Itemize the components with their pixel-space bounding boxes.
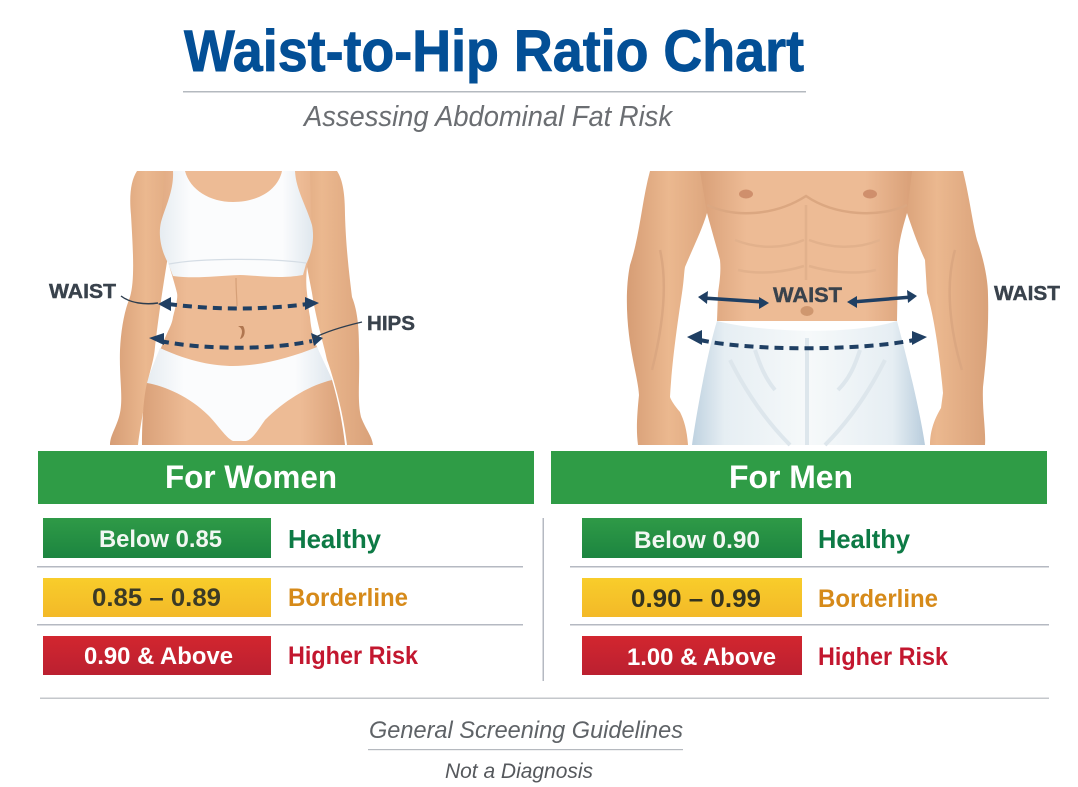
header bar bbox=[38, 451, 534, 504]
illustration: woman torso bbox=[49, 171, 415, 445]
header text: For Men bbox=[729, 459, 853, 495]
header bar bbox=[551, 451, 1047, 504]
arm muscle lines bbox=[652, 250, 962, 370]
panel: for men bbox=[551, 451, 1049, 675]
row: healthy bbox=[43, 518, 382, 558]
shorts bbox=[692, 321, 925, 445]
right waist label: WAIST bbox=[994, 283, 1060, 305]
row: higher risk: 1.00 & Above bbox=[627, 644, 776, 671]
left waist arrow bbox=[698, 291, 769, 309]
illustration: man torso bbox=[627, 171, 1060, 445]
row: higher risk: Higher Risk bbox=[818, 643, 948, 671]
title: Waist-to-Hip Ratio Chart bbox=[184, 19, 804, 84]
row: borderline bbox=[582, 578, 938, 617]
briefs bbox=[147, 347, 332, 441]
panel: for women bbox=[37, 451, 534, 675]
waist label: WAIST bbox=[49, 281, 116, 303]
shorts folds bbox=[730, 338, 885, 445]
footer heading: General Screening Guidelines bbox=[369, 717, 683, 744]
left arm bbox=[627, 171, 720, 445]
header text: For Women bbox=[165, 459, 337, 495]
hips arrow bbox=[149, 333, 323, 348]
left arm bbox=[110, 171, 190, 445]
row: borderline: 0.90 – 0.99 bbox=[631, 585, 761, 613]
centre waist label: WAIST bbox=[773, 284, 842, 307]
bra band line bbox=[169, 259, 306, 264]
row: higher risk: Higher Risk bbox=[288, 642, 418, 670]
abs bbox=[735, 205, 880, 280]
right arm bbox=[895, 171, 988, 445]
hips leader bbox=[314, 322, 362, 338]
hips label: HIPS bbox=[367, 313, 415, 335]
row: borderline: 0.85 – 0.89 bbox=[92, 584, 221, 612]
bra bbox=[160, 171, 313, 277]
abdomen line bbox=[236, 278, 237, 306]
right arm bbox=[280, 171, 373, 445]
row: borderline: Borderline bbox=[818, 585, 938, 613]
waist arrow bbox=[158, 297, 319, 311]
row: higher risk bbox=[582, 636, 948, 675]
right waist arrow bbox=[847, 290, 917, 308]
waist leader bbox=[121, 296, 158, 304]
row: healthy bbox=[582, 518, 911, 558]
row: higher risk: 0.90 & Above bbox=[84, 643, 233, 670]
row: higher risk bbox=[43, 636, 418, 675]
hips arrow bbox=[687, 330, 927, 348]
torso and thighs bbox=[142, 171, 345, 445]
row: healthy: Healthy bbox=[818, 524, 911, 554]
navel bbox=[800, 306, 814, 316]
row: borderline bbox=[43, 578, 408, 617]
subtitle: Assessing Abdominal Fat Risk bbox=[302, 101, 673, 133]
row: healthy: Below 0.85 bbox=[99, 526, 222, 553]
nipples bbox=[739, 190, 877, 198]
footer note: Not a Diagnosis bbox=[445, 760, 593, 783]
row: healthy: Below 0.90 bbox=[634, 527, 760, 554]
torso bbox=[700, 171, 912, 321]
row: borderline: Borderline bbox=[288, 584, 408, 612]
navel bbox=[238, 326, 245, 339]
chest shading bbox=[707, 196, 907, 213]
row: healthy: Healthy bbox=[288, 524, 382, 554]
